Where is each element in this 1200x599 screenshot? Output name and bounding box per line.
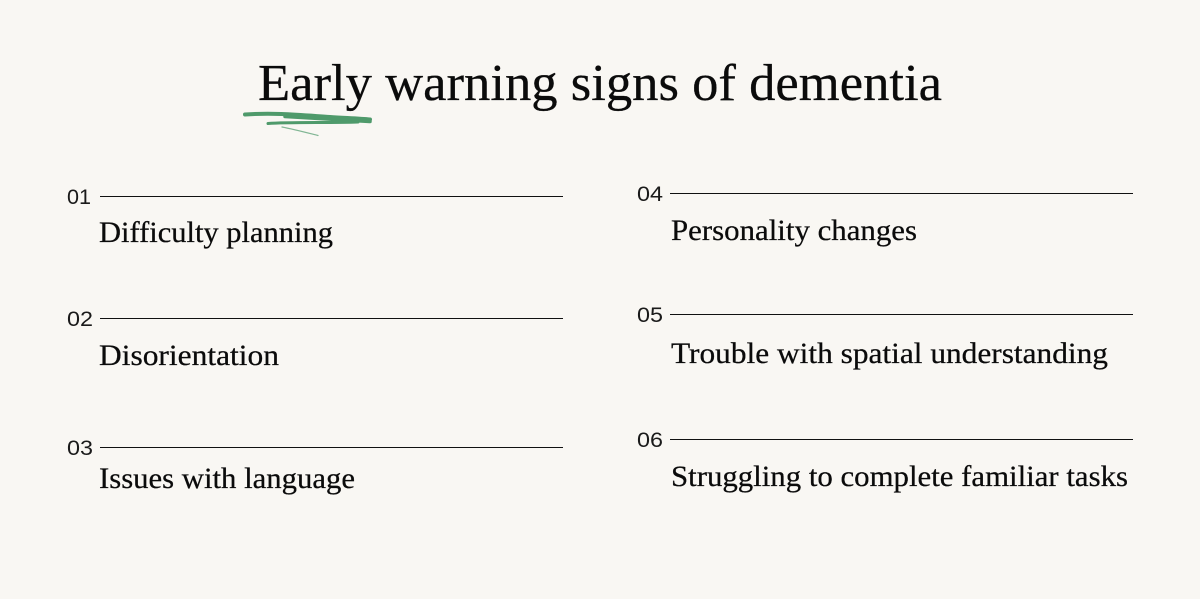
item 04: 04 [637,183,663,206]
item 02: 02 [67,308,93,331]
item 01: 01 [67,186,91,209]
item 04: Personality changes [671,214,917,247]
item 06: Struggling to complete familiar tasks [671,460,1128,493]
item 01: Difficulty planning [99,216,333,249]
item 05: 05 [637,304,663,327]
icon: green brush underline [245,114,370,136]
item 02: Disorientation [99,339,279,372]
title: Early warning signs of dementia [258,55,942,112]
item 01 [67,186,563,249]
item 06: 06 [637,429,663,452]
item 05: Trouble with spatial understanding [671,337,1108,370]
item 02 [67,308,563,372]
item 05 [637,304,1133,370]
item 03: 03 [67,437,93,460]
item 06 [637,429,1133,493]
item 03: Issues with language [99,462,355,495]
item 03 [67,437,563,495]
item 04 [637,183,1133,247]
